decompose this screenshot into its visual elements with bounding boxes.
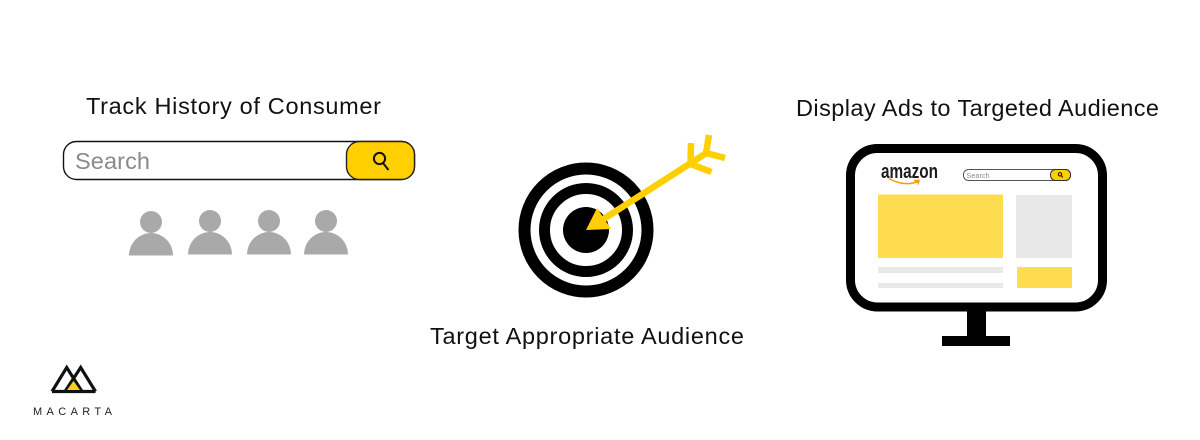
- icon: person 1: [129, 211, 173, 256]
- monitor stand: [942, 308, 1010, 346]
- mini search bar: [964, 170, 1070, 180]
- logo mark: [52, 368, 96, 392]
- panel: target appropriate audience: [430, 135, 744, 349]
- main ad block: [878, 194, 1003, 258]
- icon: magnifier: [374, 153, 388, 170]
- small ad block: [1017, 267, 1072, 288]
- text line 1: [878, 267, 1003, 273]
- icon: mini magnifier: [1058, 173, 1063, 178]
- heading: target audience: Target Appropriate Audience: [430, 323, 744, 349]
- search bar: [64, 142, 414, 180]
- icon: person 3: [247, 210, 291, 254]
- search placeholder: Search: [75, 148, 150, 174]
- icon: arrow: [586, 135, 725, 230]
- mini search text: Search: [966, 173, 990, 180]
- heading: display ads: Display Ads to Targeted Audience: [796, 95, 1159, 121]
- icon: person 4: [304, 210, 348, 254]
- amazon smile: [889, 178, 919, 184]
- panel: display ads to targeted audience: [796, 95, 1159, 346]
- sidebar placeholder: [1016, 195, 1072, 258]
- icons: four consumers: [129, 210, 348, 256]
- search button: [346, 142, 414, 180]
- mini search button: [1050, 170, 1070, 180]
- icon: bullseye target: [524, 168, 648, 292]
- amazon logo: amazon: [881, 161, 938, 183]
- icon: person 2: [188, 210, 232, 254]
- text line 2: [878, 283, 1003, 288]
- logo yellow peak: [67, 381, 80, 390]
- logo wordmark: MACARTA: [33, 406, 113, 418]
- heading: track history: Track History of Consumer: [86, 93, 381, 119]
- logo: macarta: [33, 368, 113, 418]
- monitor screen frame: [850, 148, 1102, 307]
- panel: track history of consumer: [64, 93, 414, 256]
- icon: monitor: [850, 148, 1102, 346]
